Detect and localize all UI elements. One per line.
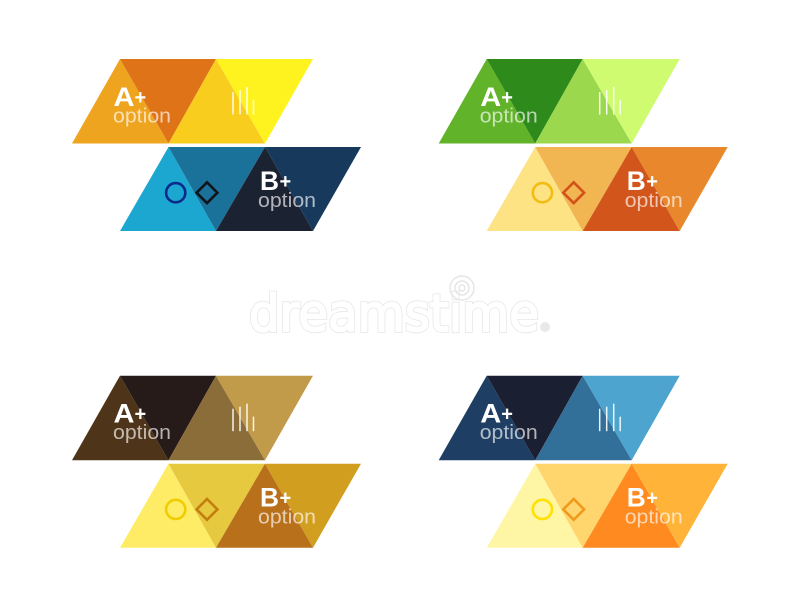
banner B: amber: option xyxy=(625,507,683,529)
banner B: orange: option xyxy=(625,190,683,212)
panel: orange and blue banners xyxy=(72,59,361,231)
banner B: gold: option xyxy=(258,507,316,529)
banner B: orange xyxy=(487,147,728,231)
banner B: orange: B xyxy=(627,166,646,196)
banner A: navy: A xyxy=(480,399,501,429)
banner A: navy: option xyxy=(480,422,538,444)
banner A: brown: + xyxy=(134,404,146,426)
banner A: green xyxy=(439,59,680,144)
panel: brown and gold banners xyxy=(72,376,361,548)
banner B: amber xyxy=(487,464,728,548)
banner A: green: + xyxy=(501,87,513,109)
panel: navy and amber banners xyxy=(439,376,728,548)
banner B: orange: + xyxy=(646,171,658,193)
banner B: gold: B xyxy=(260,483,279,513)
banner B: gold xyxy=(120,464,361,548)
banner B: blue xyxy=(120,147,361,231)
watermark: dreamstime xyxy=(249,285,539,344)
banner B: blue: + xyxy=(280,171,291,193)
banner B: amber: + xyxy=(646,488,658,510)
banner A: brown: A xyxy=(114,399,134,429)
banner B: blue: option xyxy=(258,190,316,212)
banner A: brown: option xyxy=(113,422,171,444)
banner A: brown xyxy=(72,376,313,460)
banner A: orange: option xyxy=(113,106,171,128)
panel: green and orange banners xyxy=(439,59,728,231)
banner A: green: A xyxy=(480,82,501,112)
banner A: orange: + xyxy=(134,87,146,109)
banner B: blue: B xyxy=(260,166,279,196)
banner A: green: option xyxy=(480,106,538,128)
banner A: navy xyxy=(439,376,680,460)
banner A: orange xyxy=(72,59,313,144)
banner A: navy: + xyxy=(501,404,513,426)
banner A: orange: A xyxy=(114,82,134,112)
watermark: dreamstime xyxy=(249,285,539,344)
banner B: gold: + xyxy=(280,488,291,510)
banner B: amber: B xyxy=(627,483,646,513)
